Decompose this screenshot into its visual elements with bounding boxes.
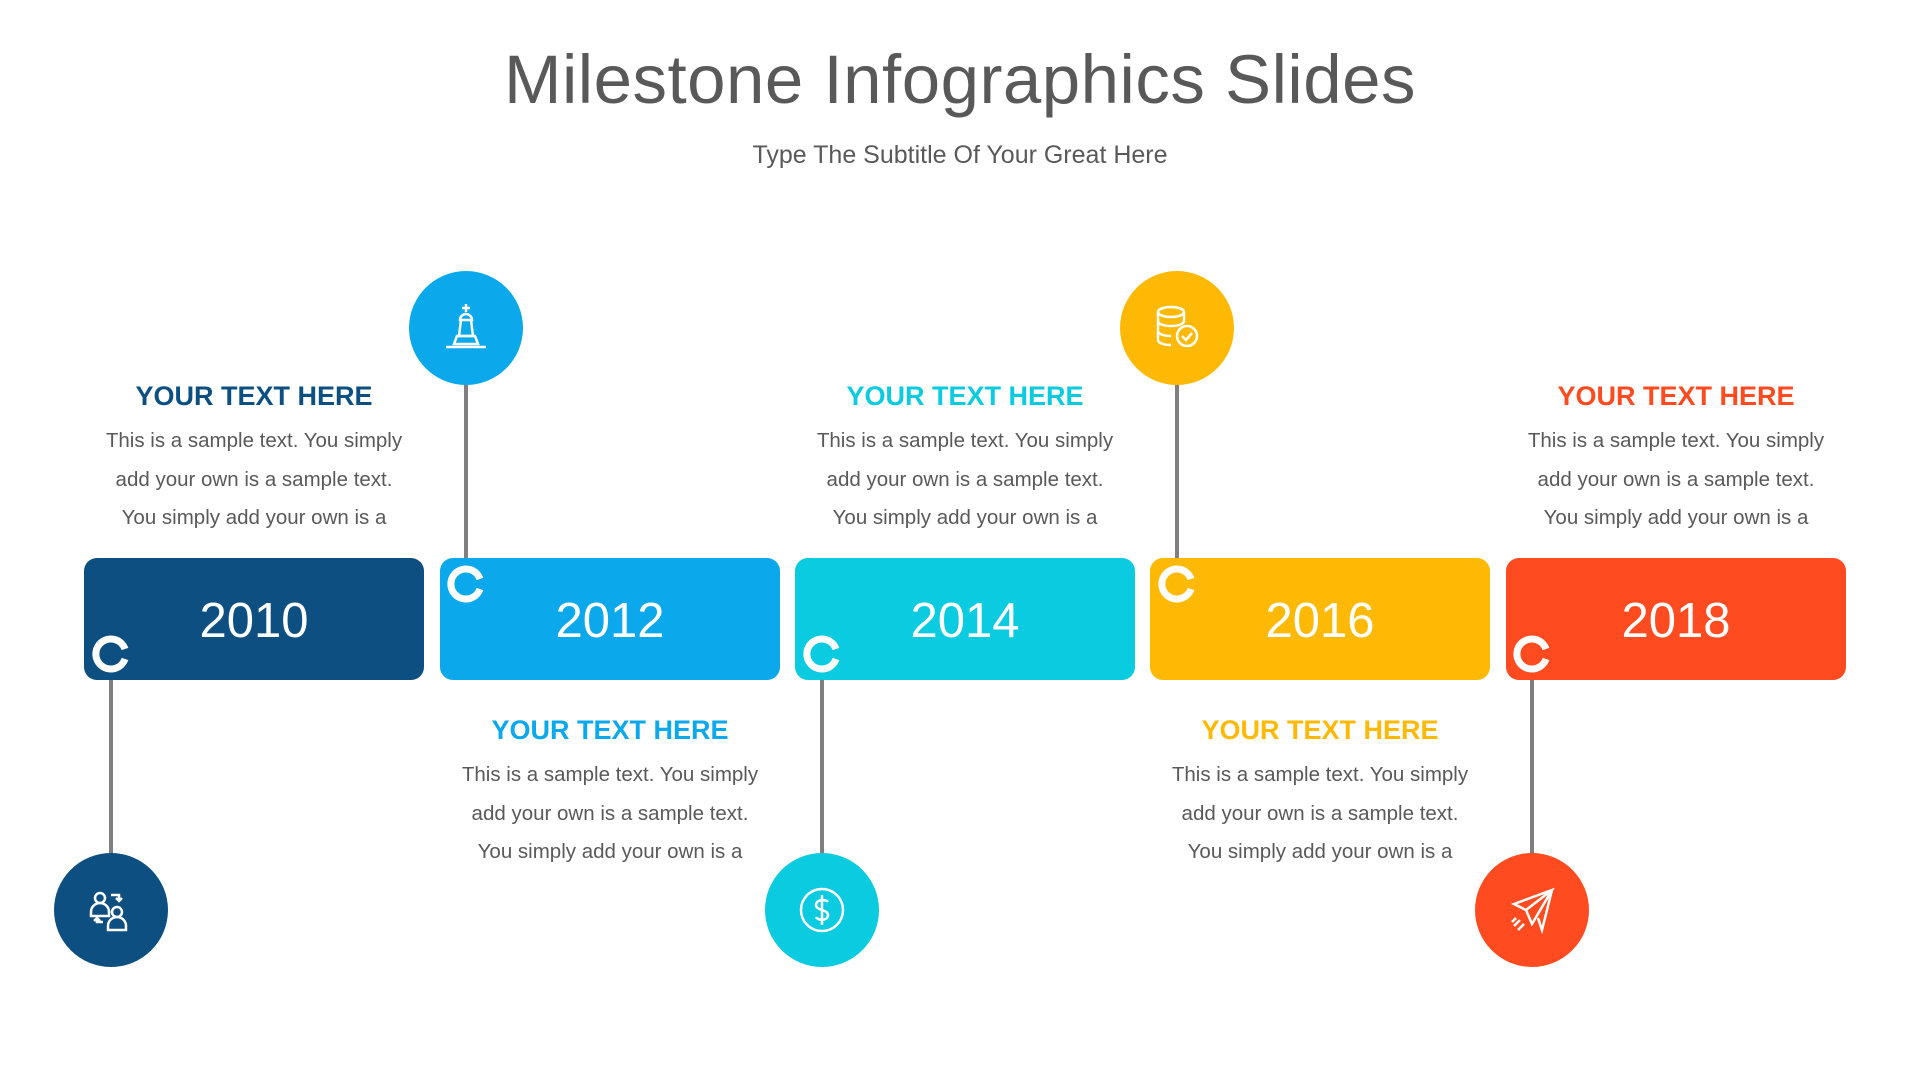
text block 2016: add your own is a sample text.: [1182, 802, 1458, 824]
box 2016: 2016: [1265, 594, 1374, 648]
text block 2014: You simply add your own is a: [833, 506, 1097, 529]
connector line 2010: [109, 654, 113, 854]
text block 2014: YOUR TEXT HERE: [846, 381, 1084, 411]
text block 2012: add your own is a sample text.: [472, 802, 748, 824]
box 2012: 2012: [555, 594, 664, 648]
text block 2016: YOUR TEXT HERE: [1201, 715, 1439, 745]
text block 2018: This is a sample text. You simply: [1528, 429, 1824, 452]
text block 2010: YOUR TEXT HERE: [135, 381, 373, 411]
text block 2014: [817, 381, 1113, 529]
text block 2012: This is a sample text. You simply: [462, 763, 758, 786]
subtitle: Type The Subtitle Of Your Great Here: [752, 141, 1168, 169]
box 2018: 2018: [1621, 594, 1730, 648]
text block 2016: You simply add your own is a: [1188, 840, 1452, 863]
box 2010: [84, 558, 424, 680]
box 2018: [1506, 558, 1846, 680]
icon: people exchange: [54, 853, 168, 967]
text block 2018: add your own is a sample text.: [1538, 468, 1814, 490]
connector line 2016: [1175, 380, 1179, 584]
box 2012: [440, 558, 780, 680]
connector line 2014: [820, 654, 824, 854]
text block 2010: add your own is a sample text.: [116, 468, 392, 490]
text block 2012: YOUR TEXT HERE: [491, 715, 729, 745]
icon: database check: [1120, 271, 1234, 385]
text block 2014: This is a sample text. You simply: [817, 429, 1113, 452]
connector line 2012: [464, 380, 468, 584]
icon: chess king: [409, 271, 523, 385]
text block 2010: [106, 381, 402, 529]
text block 2012: [462, 715, 758, 863]
box 2016: [1150, 558, 1490, 680]
title: Milestone Infographics Slides: [504, 41, 1416, 118]
text block 2014: add your own is a sample text.: [827, 468, 1103, 490]
text block 2018: YOUR TEXT HERE: [1557, 381, 1795, 411]
text block 2016: This is a sample text. You simply: [1172, 763, 1468, 786]
box 2014: 2014: [910, 594, 1020, 648]
text block 2010: This is a sample text. You simply: [106, 429, 402, 452]
connector line 2018: [1530, 654, 1534, 854]
box 2014: [795, 558, 1135, 680]
box 2010: 2010: [199, 594, 308, 648]
text block 2016: [1172, 715, 1468, 863]
text block 2012: You simply add your own is a: [478, 840, 742, 863]
text block 2018: You simply add your own is a: [1544, 506, 1808, 529]
icon: dollar: [765, 853, 879, 967]
text block 2010: You simply add your own is a: [122, 506, 386, 529]
icon: paper plane: [1475, 853, 1589, 967]
text block 2018: [1528, 381, 1824, 529]
